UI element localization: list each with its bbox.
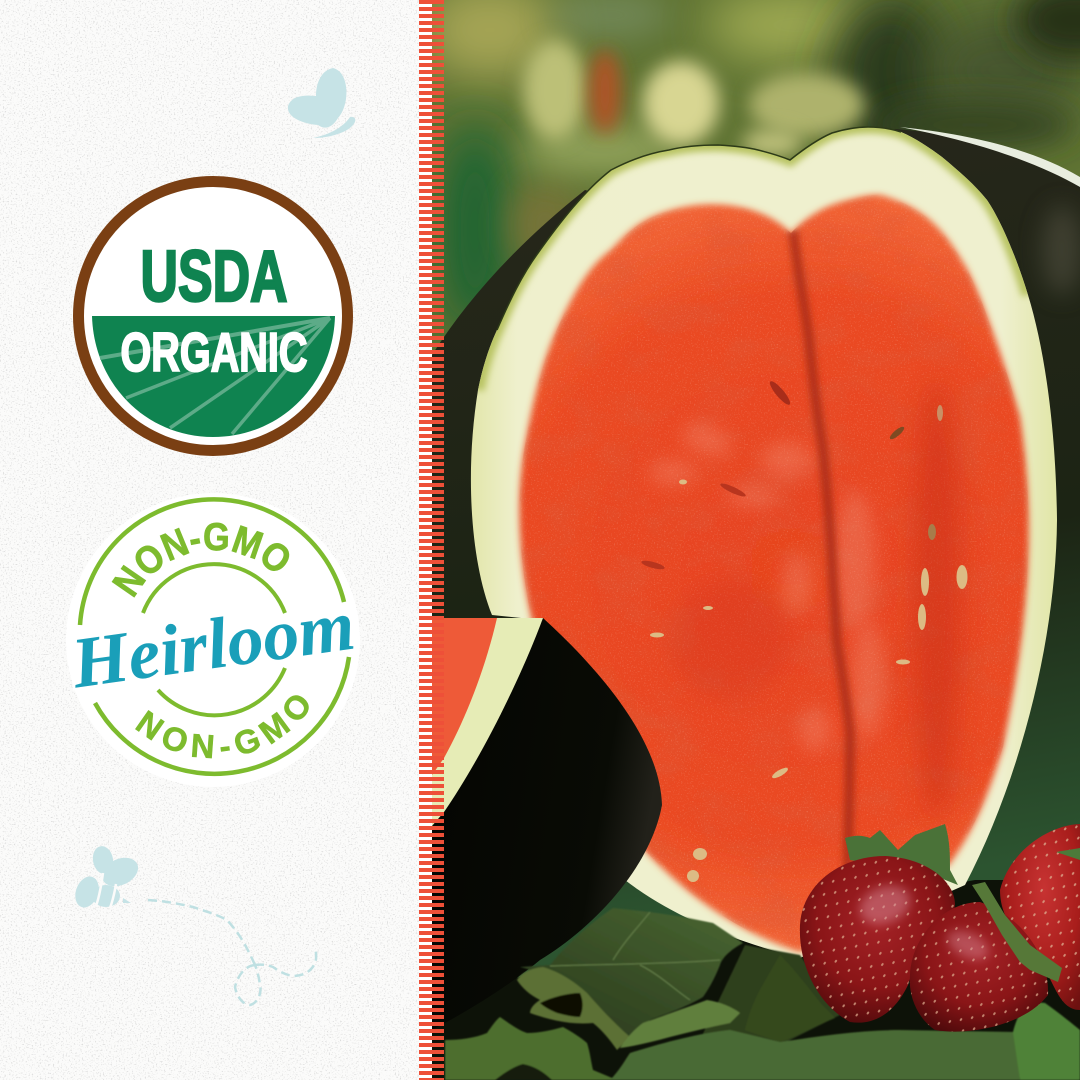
bright lobe leaf bbox=[1013, 1003, 1080, 1080]
NON-GMO top: NON-GMO bbox=[112, 522, 290, 598]
curled leaf bbox=[517, 967, 630, 1050]
ground leaves bbox=[445, 908, 1080, 1080]
crinkled left leaf bbox=[445, 1017, 617, 1080]
Heirloom script: Heirloom bbox=[66, 585, 359, 704]
front lower leaf bbox=[610, 1030, 1020, 1080]
USDA wordmark: USDA bbox=[140, 237, 288, 317]
badge: USDA Organic bbox=[78, 182, 348, 450]
badge: Non-GMO Heirloom bbox=[66, 493, 360, 787]
watermelon dark outer rind bbox=[432, 129, 1080, 1000]
rind specular glare bbox=[900, 127, 1080, 295]
field rays bbox=[100, 318, 330, 434]
NON-GMO bottom: NON-GMO bbox=[135, 695, 309, 758]
dark back leaf bbox=[700, 945, 840, 1045]
icon: bee with dashed trail bbox=[71, 844, 316, 1005]
ORGANIC wordmark: ORGANIC bbox=[120, 321, 308, 383]
blurred garden background bbox=[432, 0, 1080, 355]
linen background panel bbox=[0, 0, 432, 1080]
strawberry right bbox=[1000, 824, 1080, 1010]
flesh bbox=[500, 190, 1040, 970]
watermelon wedge front bbox=[432, 618, 662, 1030]
strawberry middle bbox=[905, 882, 1062, 1038]
watermelon pale rind bbox=[471, 127, 1057, 958]
large serrated leaf bbox=[520, 908, 743, 1047]
strawberry left bbox=[800, 856, 955, 1023]
outer and inner rings bbox=[80, 499, 349, 774]
strawberry left leaves bbox=[845, 824, 958, 885]
photo: watermelon and strawberries bbox=[420, 0, 1080, 1080]
ground shadow base bbox=[432, 880, 1080, 1080]
striped border bbox=[419, 0, 444, 1080]
leaf tip bbox=[620, 1000, 740, 1048]
watermelon seeds bbox=[641, 379, 968, 882]
seal ring bbox=[78, 182, 348, 450]
icon: butterfly bbox=[288, 68, 355, 138]
seal field bbox=[92, 316, 335, 437]
